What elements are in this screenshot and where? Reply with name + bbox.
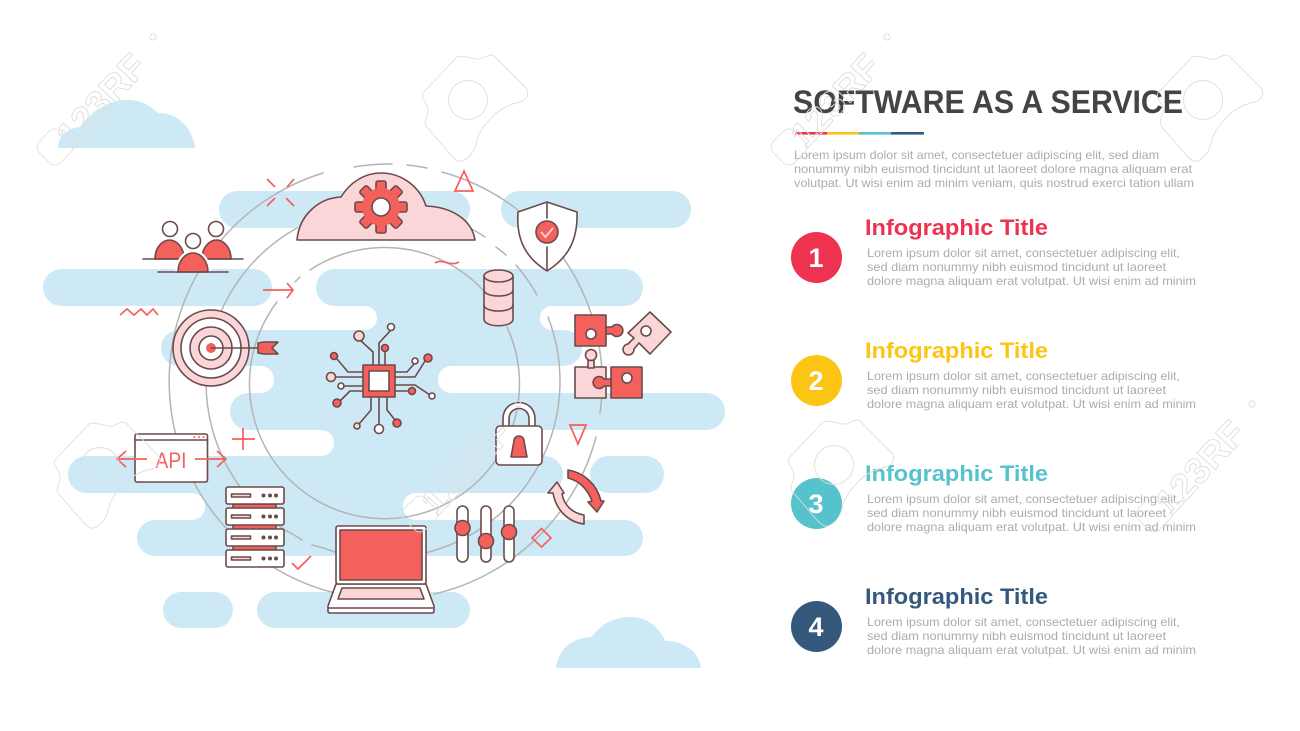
item 3: Lorem ipsum dolor sit amet, consectetuer adipiscing elit,	[867, 492, 1180, 506]
intro paragraph: Lorem ipsum dolor sit amet, consectetuer adipiscing elit, sed diam	[794, 148, 1159, 162]
background blue pills	[43, 191, 725, 628]
item 3: dolore magna aliquam erat volutpat. Ut wisi enim ad minim	[867, 520, 1196, 534]
watermark: top left logo	[34, 34, 156, 168]
item 4: sed diam nonummy nibh euismod tincidunt ut laoreet	[867, 629, 1167, 643]
watermark: lower right logo: 123RF	[1147, 413, 1253, 522]
item 2: Infographic Title	[865, 338, 1048, 363]
watermark: egg top centre	[422, 55, 528, 161]
watermark: egg lower left	[54, 422, 160, 528]
item 1: sed diam nonummy nibh euismod tincidunt ut laoreet	[867, 260, 1167, 274]
icon: target with arrow	[173, 310, 278, 386]
title: SOFTWARE AS A SERVICE	[793, 84, 1183, 120]
watermark: top centre-right logo	[768, 34, 890, 168]
item 3: sed diam nonummy nibh euismod tincidunt ut laoreet	[867, 506, 1167, 520]
cloud bottom right	[556, 617, 701, 668]
intro paragraph	[794, 148, 1194, 190]
cloud top left	[58, 100, 195, 148]
item 3: 3	[808, 489, 824, 519]
item 2: Lorem ipsum dolor sit amet, consectetuer adipiscing elit,	[867, 369, 1180, 383]
intro paragraph: nonummy nibh euismod tincidunt ut laoreet dolore magna aliquam erat	[794, 162, 1193, 176]
item 4: dolore magna aliquam erat volutpat. Ut wisi enim ad minim	[867, 643, 1196, 657]
item 1: 1	[808, 243, 824, 273]
watermark: egg top right	[1157, 55, 1263, 161]
icon: API window	[117, 434, 226, 482]
icon: padlock	[496, 402, 542, 465]
icon: sliders	[455, 506, 516, 562]
item 2: sed diam nonummy nibh euismod tincidunt ut laoreet	[867, 383, 1167, 397]
concentric rings	[169, 164, 602, 594]
icon: refresh arrows	[548, 470, 604, 524]
icon: shield with check	[518, 202, 577, 271]
item 2: 2	[808, 366, 824, 396]
icon: laptop	[328, 526, 434, 613]
watermarks	[34, 34, 1263, 535]
watermark: centre logo	[399, 401, 521, 535]
icon: microchip	[326, 324, 435, 434]
item 4: Lorem ipsum dolor sit amet, consectetuer adipiscing elit,	[867, 615, 1180, 629]
item 4: Infographic Title	[865, 584, 1048, 609]
icon: server rack	[226, 487, 284, 567]
item 1	[791, 215, 1196, 288]
small decorative marks	[120, 171, 586, 569]
icon: cloud with gear	[297, 173, 475, 240]
title underline colour bar	[795, 132, 924, 135]
watermark: top centre-right logo: 123RF	[782, 46, 888, 155]
item 4: 4	[808, 612, 824, 642]
watermark: lower right logo	[1133, 401, 1255, 535]
item 2	[791, 338, 1196, 411]
item 2: dolore magna aliquam erat volutpat. Ut wisi enim ad minim	[867, 397, 1196, 411]
item 1: Infographic Title	[865, 215, 1048, 240]
icon: puzzle pieces	[575, 312, 671, 398]
item 1: Lorem ipsum dolor sit amet, consectetuer adipiscing elit,	[867, 246, 1180, 260]
item 1: dolore magna aliquam erat volutpat. Ut wisi enim ad minim	[867, 274, 1196, 288]
item 4	[791, 584, 1196, 657]
icon: team of people	[143, 222, 243, 272]
watermark: centre logo: 123RF	[413, 413, 519, 522]
item 3: Infographic Title	[865, 461, 1048, 486]
item 3	[791, 461, 1196, 534]
intro paragraph: volutpat. Ut wisi enim ad minim veniam, quis nostrud exerci tation ullam	[794, 176, 1194, 190]
watermark: top left logo: 123RF	[48, 46, 154, 155]
icon: API window: API	[156, 448, 186, 473]
icon: database	[484, 270, 513, 326]
watermark: egg lower middle	[788, 420, 894, 526]
